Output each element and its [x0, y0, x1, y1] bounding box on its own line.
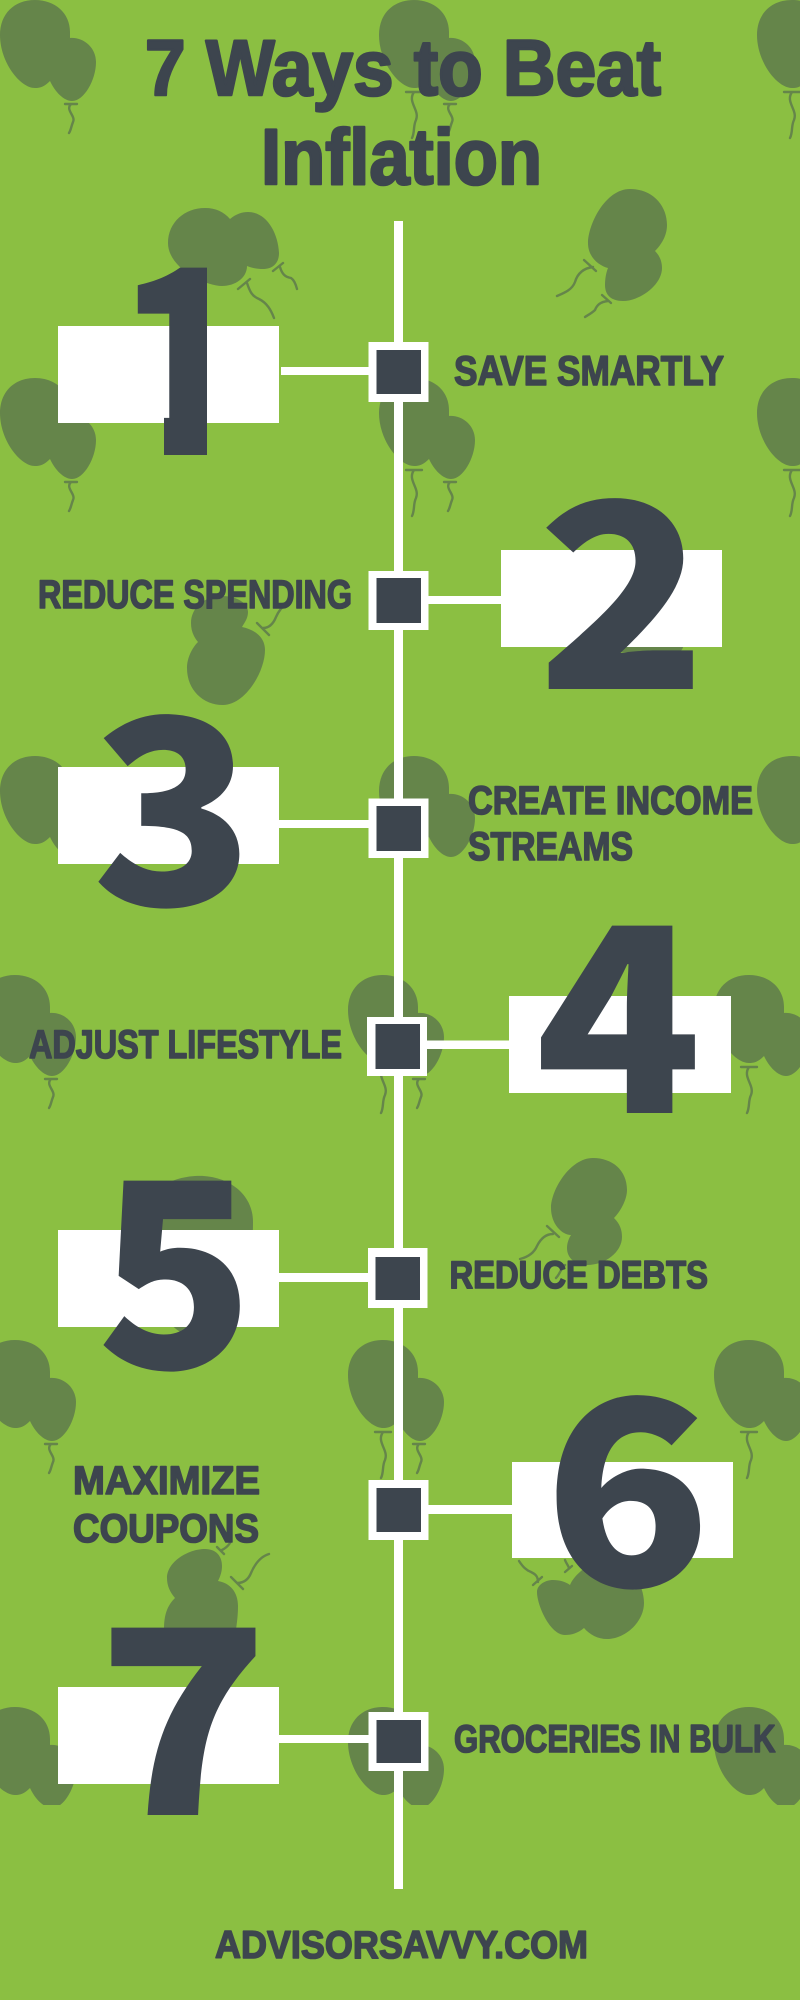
- step 3: [58, 607, 753, 980]
- step 5: 5: [97, 1070, 254, 1443]
- footer website: ADVISORSAVVY.COM: [215, 1924, 588, 1967]
- step 3: CREATE INCOME: [468, 779, 753, 823]
- step 2: REDUCE SPENDING: [38, 573, 352, 617]
- title: [145, 23, 661, 201]
- step 2: 2: [537, 391, 707, 764]
- step 5: [58, 1070, 708, 1443]
- step 1: [58, 157, 724, 530]
- step 1: 1: [115, 157, 255, 530]
- step 5: REDUCE DEBTS: [450, 1254, 708, 1297]
- step 6: MAXIMIZE: [73, 1459, 260, 1503]
- step 7: 7: [97, 1517, 269, 1890]
- timeline line: [394, 221, 403, 1889]
- title: 7 Ways to Beat: [145, 23, 661, 112]
- step 4: [29, 815, 731, 1188]
- step 4: ADJUST LIFESTYLE: [29, 1023, 342, 1067]
- step 6: COUPONS: [73, 1507, 259, 1551]
- step 2: [38, 391, 722, 764]
- title: Inflation: [261, 112, 542, 201]
- step 3: 3: [92, 607, 254, 980]
- step 6: [73, 1288, 733, 1661]
- step 7: [58, 1517, 776, 1890]
- step 4: 4: [535, 815, 702, 1188]
- step 1: SAVE SMARTLY: [454, 347, 724, 394]
- step 6: 6: [544, 1288, 711, 1661]
- step 3: STREAMS: [468, 825, 633, 869]
